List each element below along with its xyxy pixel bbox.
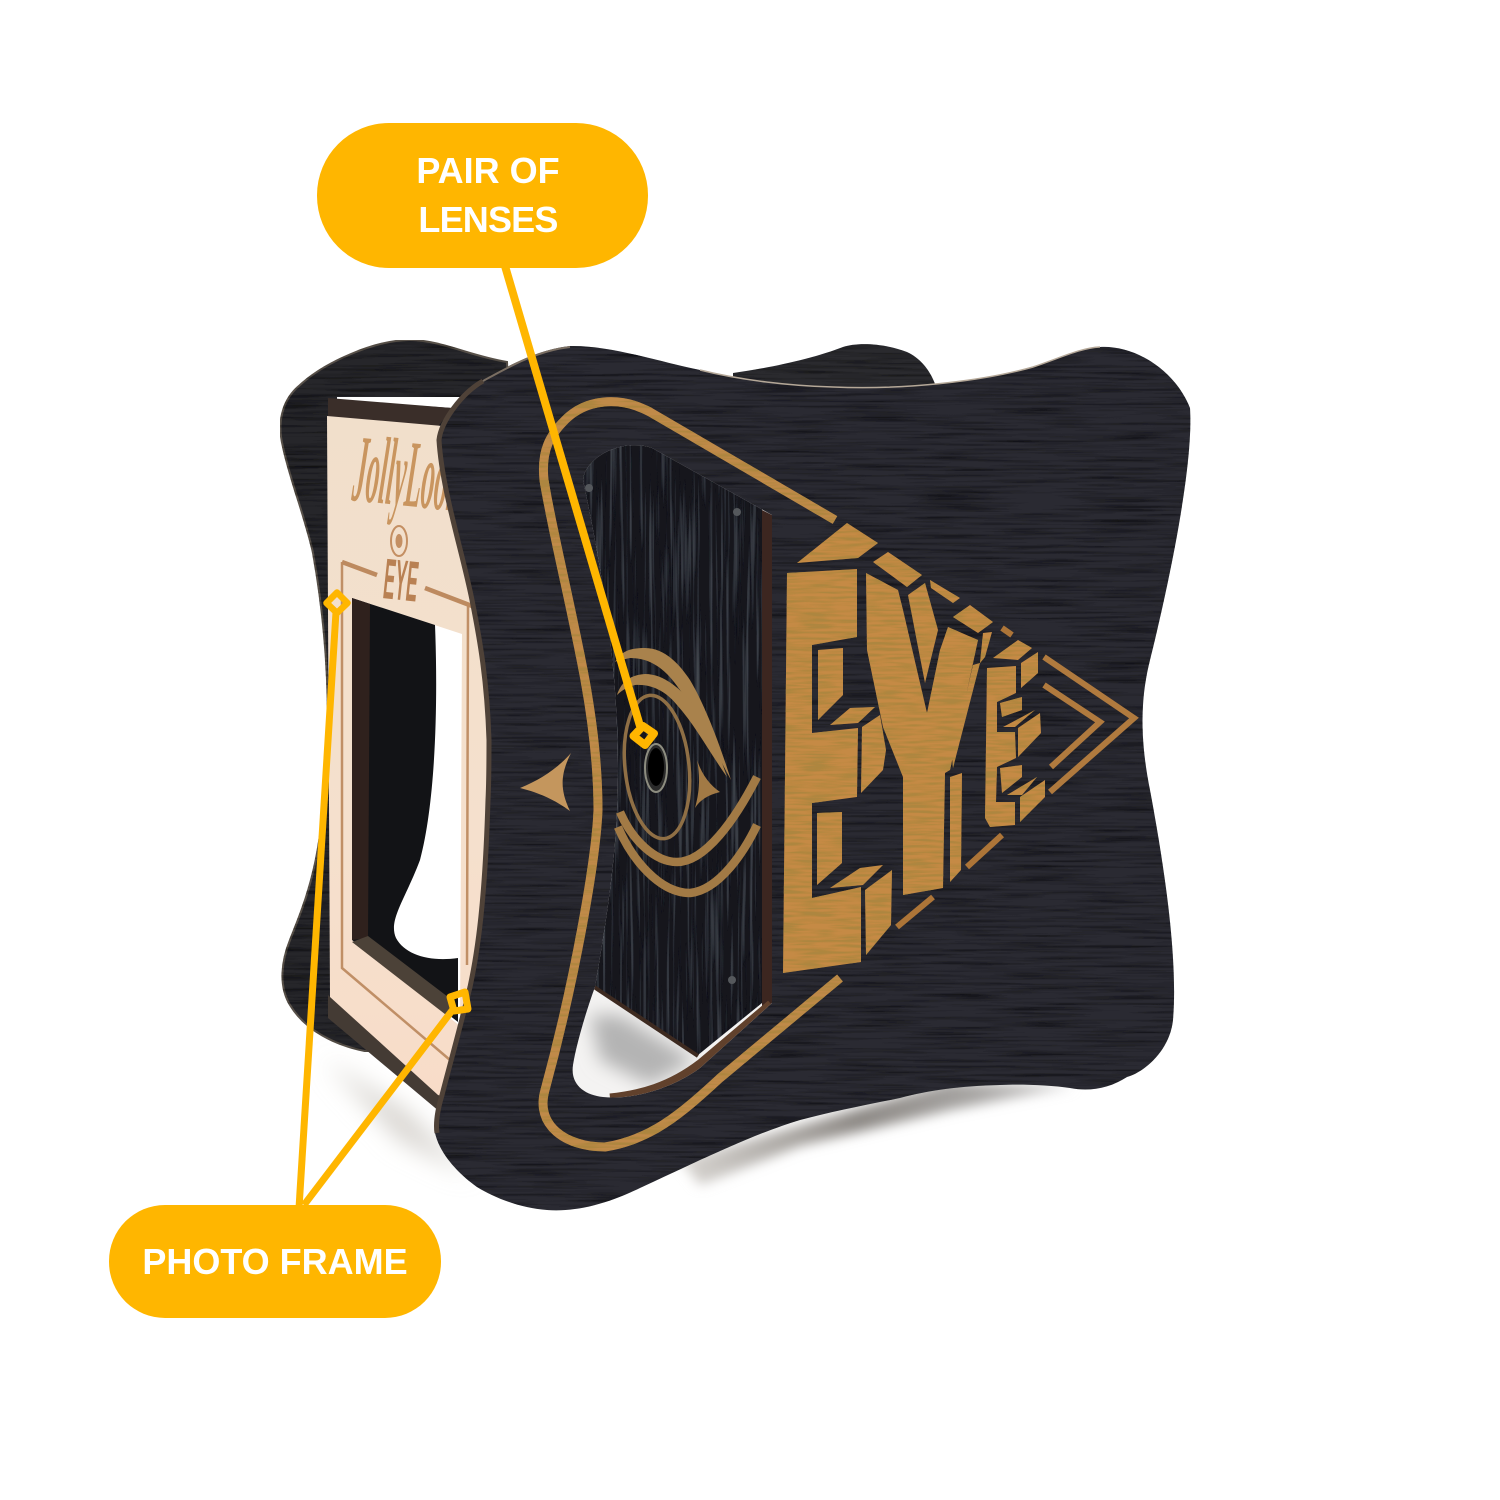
letter Y (866, 552, 993, 895)
engraved top grooves (342, 562, 472, 606)
callout: pair of lenses: LENSES (418, 199, 558, 240)
screws (585, 484, 741, 984)
last letter E (985, 640, 1045, 827)
engraved eye (585, 484, 757, 984)
frame top plywood edge (328, 398, 452, 428)
window bottom plywood edge (610, 1004, 771, 1098)
callout: pair of lenses: PAIR OF (416, 150, 560, 191)
front panel top-left edge highlight (483, 347, 570, 381)
callout lines and markers (299, 266, 654, 1208)
plate bottom edge (594, 987, 698, 1056)
shadow inside window (590, 1015, 695, 1085)
frame opening (352, 598, 462, 1026)
first letter E (783, 523, 892, 973)
plate right plywood edge (762, 510, 772, 1010)
view through the opening (352, 598, 458, 1022)
upper brow arcs (615, 648, 731, 780)
callout: photo frame (109, 1205, 441, 1318)
marker: frame right (450, 992, 468, 1011)
inner lens plate (570, 440, 762, 1055)
frame small eye icon (391, 526, 407, 556)
front panel body (434, 346, 1190, 1210)
lens hole (645, 744, 667, 792)
lower lid arcs (618, 777, 757, 893)
engraved EYE lettering (783, 523, 1045, 973)
line to frame left (299, 612, 336, 1208)
frame logo text: JollyLook (348, 416, 467, 533)
iris ring (618, 692, 696, 842)
frame bottom plywood edge (328, 995, 440, 1112)
shadow left of frame (325, 1060, 470, 1175)
frame EYE text: EYE (381, 547, 421, 614)
callout: pair of lenses (317, 123, 648, 268)
left arrow engraving (520, 753, 571, 811)
floor shadow (325, 1060, 1075, 1185)
engraved grooves (342, 562, 468, 1060)
front panel top edge highlight (700, 347, 1100, 388)
line to frame right (304, 1008, 454, 1205)
front panel left plywood edge (436, 381, 489, 1133)
photo frame (327, 397, 500, 1115)
right chevrons (1044, 657, 1134, 792)
eye corner triangle (695, 760, 720, 808)
window outline engraving (543, 402, 840, 1147)
rear panel left wing (280, 340, 540, 1052)
triangle outline segments (897, 628, 1012, 927)
window interior (570, 440, 772, 1098)
white gap above frame (337, 397, 464, 408)
callout: photo frame: PHOTO FRAME (142, 1241, 408, 1282)
inner bottom plywood edge (352, 936, 452, 1018)
camera: rear panel (280, 340, 935, 1052)
marker: lenses (634, 726, 654, 745)
camera: front panel (434, 346, 1190, 1210)
line to lenses (505, 266, 640, 726)
shadow under front panel (680, 1082, 1075, 1185)
marker: frame left (326, 592, 348, 613)
frame face (327, 416, 500, 1115)
inner left plywood edge (352, 598, 370, 940)
rear panel right sliver (733, 344, 935, 400)
window background (573, 445, 772, 1098)
